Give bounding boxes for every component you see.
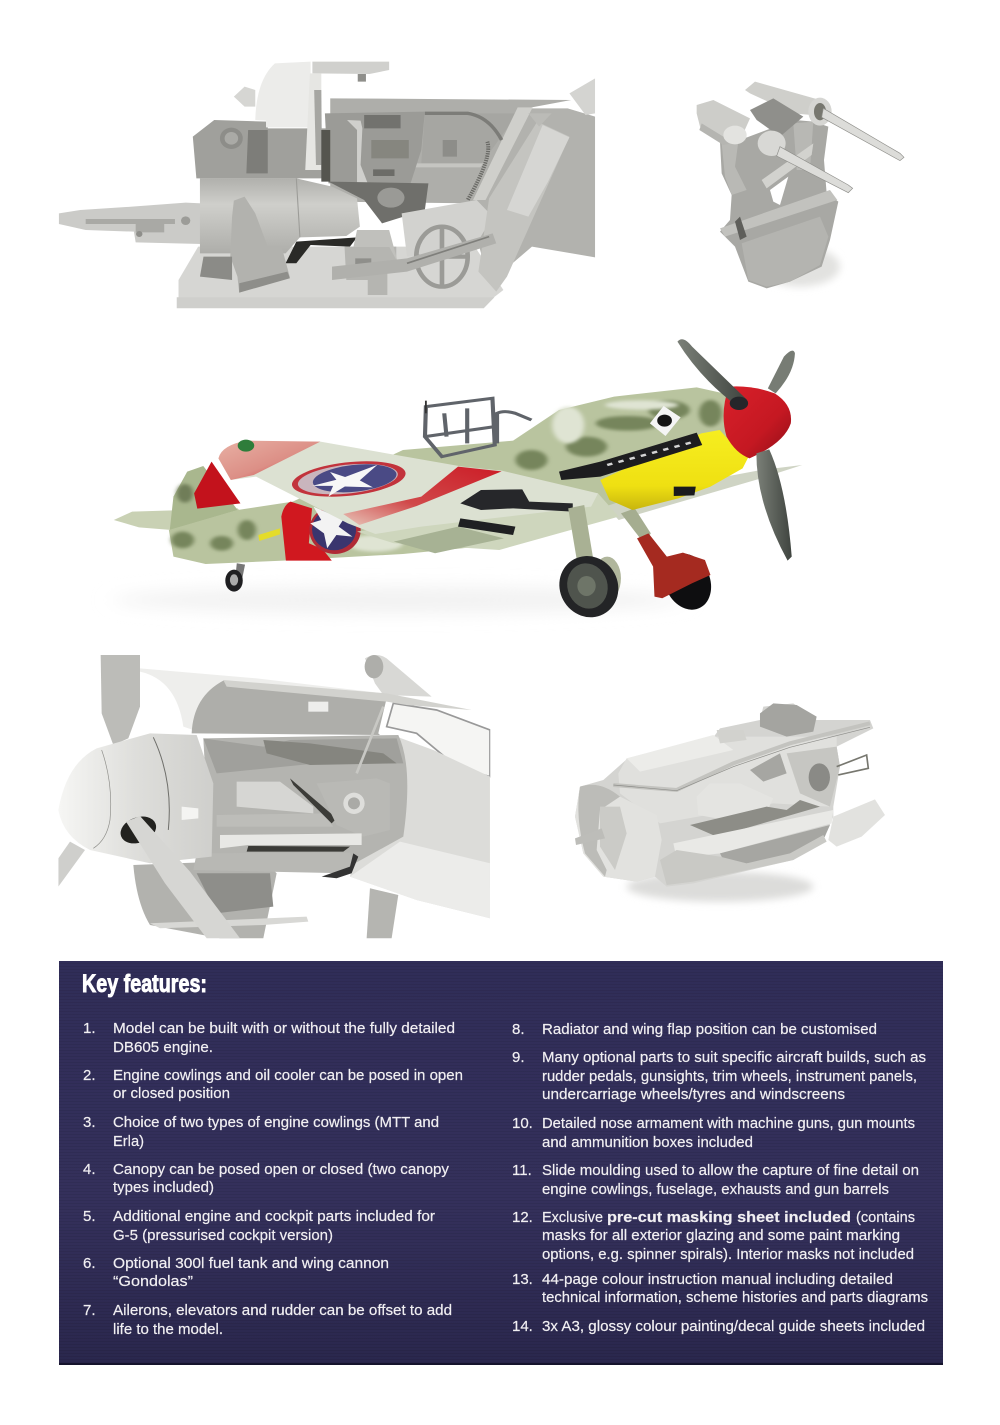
item 11: 11. [512, 1162, 532, 1179]
top seat cylinder [255, 62, 311, 127]
item 7: Ailerons, elevators and rudder can be offset to add [113, 1302, 452, 1319]
item 7: life to the model. [113, 1321, 223, 1338]
item 13: 13. [512, 1271, 533, 1288]
right angled frame [473, 107, 533, 200]
item 5 [83, 1208, 435, 1244]
seat back plate [402, 200, 488, 247]
gun barrels [777, 147, 853, 193]
item 4 [83, 1161, 449, 1196]
lower open cowl [133, 860, 277, 938]
item 3 [83, 1114, 439, 1150]
reduction gear casing [575, 785, 662, 882]
photo: cockpit interior render [59, 62, 595, 308]
item 5: 5. [83, 1208, 96, 1225]
tailplane [114, 508, 247, 532]
far right wall [476, 108, 595, 263]
wing upper surface [218, 442, 598, 534]
lower propeller blade [126, 816, 240, 938]
engine block [618, 737, 840, 823]
item 1 [83, 1020, 455, 1056]
propeller blades [677, 339, 795, 561]
item 4: types included) [113, 1179, 214, 1196]
wingtip red fade [218, 441, 320, 480]
fuselage mottling [171, 400, 722, 551]
item 10: 10. [512, 1115, 533, 1132]
wing star roundel [289, 456, 409, 502]
propeller far wing [600, 465, 802, 520]
gun barrel assembly [59, 203, 202, 244]
item 11: engine cowlings, fuselage, exhausts and gun barrels [542, 1181, 889, 1198]
wing underside [357, 493, 619, 550]
item 11 [512, 1162, 919, 1198]
item 2: or closed position [113, 1085, 230, 1102]
fuselage star roundel [309, 506, 361, 554]
cowl support rod [357, 707, 383, 773]
far fuselage top and far blade [140, 668, 387, 730]
item 13: technical information, scheme histories and parts diagrams [542, 1289, 928, 1306]
photo: DB605 engine render [575, 703, 885, 902]
open canopy frame [425, 398, 531, 457]
item 11: Slide moulding used to allow the capture of fine detail on [542, 1162, 919, 1179]
far landing gear leg [621, 508, 651, 543]
item 6: “Gondolas” [113, 1273, 193, 1290]
panel: key features [59, 961, 943, 1365]
dark gap below tank [286, 237, 357, 263]
propeller shaft [575, 828, 605, 845]
engine silhouette [575, 703, 873, 887]
control rods [332, 233, 496, 280]
photo: painted aircraft model [114, 339, 802, 619]
item 13 [512, 1271, 928, 1306]
tail wheel [225, 563, 245, 592]
yellow fuselage stripe [258, 528, 280, 541]
item 9: rudder pedals, gunsights, trim wheels, instrument panels, [542, 1068, 917, 1085]
exhaust stacks band [559, 433, 702, 480]
engine block parts [237, 782, 313, 813]
spinner and cowl nose [58, 733, 213, 863]
item 3: 3. [83, 1114, 96, 1131]
canopy windows [387, 703, 490, 777]
item 6: 6. [83, 1255, 96, 1272]
yellow cowling [600, 430, 749, 510]
soft shadow [760, 247, 840, 287]
item 9 [512, 1049, 926, 1103]
item 2 [83, 1067, 463, 1102]
item 9: Many optional parts to suit specific aircraft builds, such as [542, 1049, 926, 1066]
item 4: Canopy can be posed open or closed (two canopy [113, 1161, 449, 1178]
central control panel [325, 112, 425, 183]
item 12: masks for all exterior glazing and some paint marking [542, 1227, 900, 1244]
photo: open engine bay render [58, 655, 490, 938]
coiled hose [425, 113, 502, 140]
engine bay background [203, 735, 407, 863]
item 6 [83, 1255, 389, 1290]
item 3: Erla) [113, 1133, 144, 1150]
item 14: 3x A3, glossy colour painting/decal guide sheets included [542, 1318, 925, 1335]
fuselage main [169, 387, 736, 564]
fuselage roundel band [281, 502, 332, 561]
item 12: options, e.g. spinner spirals). Interior masks not included [542, 1246, 914, 1263]
item 9: undercarriage wheels/tyres and windscreens [542, 1086, 845, 1103]
item 9: 9. [512, 1049, 525, 1066]
item 5: G-5 (pressurised cockpit version) [113, 1227, 333, 1244]
exhaust ledge [220, 833, 362, 848]
cylinder ports [690, 800, 820, 837]
pipe runs [613, 723, 870, 790]
cockpit floor [179, 247, 503, 298]
item 14: 14. [512, 1318, 533, 1335]
spinner [724, 386, 791, 458]
soft shadow [627, 872, 813, 902]
item 2: Engine cowlings and oil cooler can be posed in open [113, 1067, 463, 1084]
item 2: 2. [83, 1067, 96, 1084]
item 8: Radiator and wing flap position can be customised [542, 1021, 877, 1038]
item 1: 1. [83, 1020, 96, 1037]
upper propeller blade [101, 655, 140, 745]
undercarriage leg [367, 888, 398, 938]
blade root slot [120, 816, 156, 844]
item 10: Detailed nose armament with machine guns, gun mounts [542, 1115, 915, 1132]
rudder red [194, 462, 240, 509]
item 12 [512, 1209, 915, 1263]
cowling intake [674, 487, 696, 496]
item 5: Additional engine and cockpit parts included for [113, 1208, 435, 1225]
fuel tank [200, 178, 360, 253]
item 1: DB605 engine. [113, 1039, 213, 1056]
rear fin piece [828, 799, 885, 847]
item 8: 8. [512, 1021, 525, 1038]
item 6: Optional 300l fuel tank and wing cannon [113, 1255, 389, 1272]
ground shadow [114, 587, 683, 613]
heading: Key features: [82, 970, 207, 998]
item 3: Choice of two types of engine cowlings (MTT and [113, 1114, 439, 1131]
item 12: pre-cut masking sheet included [607, 1209, 851, 1226]
item 12: Exclusive [542, 1209, 603, 1226]
main mount body [720, 120, 838, 288]
trim wheel [416, 227, 468, 287]
dark under-panel machinery [328, 182, 428, 223]
left main gear red leg and wheel [637, 533, 717, 612]
supercharger at top [760, 703, 817, 737]
back wall [330, 98, 571, 203]
oil tank [697, 783, 773, 818]
item 7: 7. [83, 1302, 96, 1319]
item 12: 12. [512, 1209, 533, 1226]
item 10: and ammunition boxes included [542, 1134, 753, 1151]
item 7 [83, 1302, 452, 1338]
photo: nose gun mount render [697, 82, 904, 288]
wingtip emblem [238, 440, 254, 452]
radiator and wheel well [460, 489, 573, 512]
emblem diamond [650, 406, 681, 436]
lower left blade stub [58, 842, 85, 887]
item 4: 4. [83, 1161, 96, 1178]
exhaust shelf [673, 810, 833, 858]
mount opening [770, 177, 788, 205]
barrel collars [723, 126, 747, 144]
main wheel and leg [556, 505, 622, 619]
wing red band [343, 467, 502, 525]
supercharger housing [787, 747, 840, 807]
item 12: (contains [856, 1209, 915, 1226]
rear gun receivers [697, 100, 750, 140]
item 13: 44-page colour instruction manual including detailed [542, 1271, 893, 1288]
rear fuselage [350, 737, 490, 918]
left console box [193, 120, 328, 178]
fin with mottling [170, 466, 238, 530]
item 1: Model can be built with or without the fully detailed [113, 1020, 455, 1037]
raised upper cowl panel [192, 681, 387, 735]
floor fittings [345, 247, 396, 295]
rudder pedal and seat bracket [230, 197, 290, 293]
item 10 [512, 1115, 915, 1151]
